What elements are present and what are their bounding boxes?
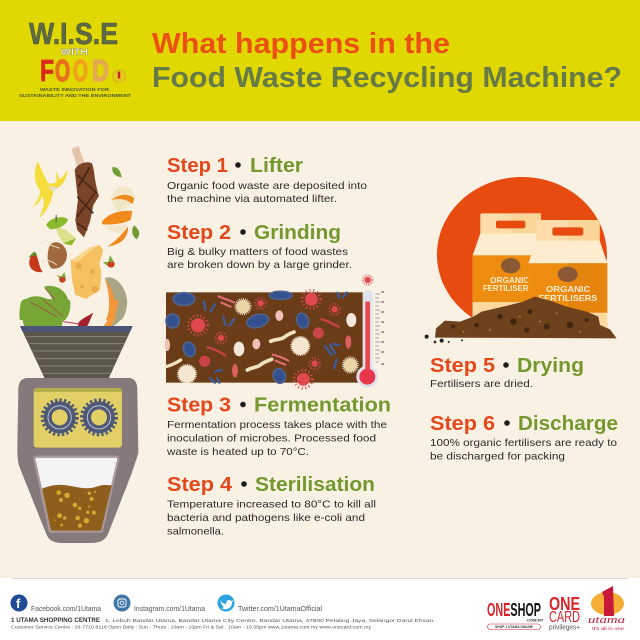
address name: 1 UTAMA SHOPPING CENTRE [11,617,101,624]
step 6: Step 6 [430,413,495,435]
icon: potato with sprouts [38,241,67,269]
icon: right gear [82,400,116,434]
icon: melon rind [105,277,127,320]
logo: OneShop: SHOP 1 UTAMA ONLINE [495,625,534,629]
logo: OneCard: privileges+ [549,622,581,632]
contact line: Customer Service Centre : 03-7710 8118 Open Daily : Sun - Thurs : 10am - 10pm Fri & Sat : 10am - 10.30pm www.1utama.com.my www.onecard.com.my [11,624,372,630]
step 1 [167,155,367,205]
logo: OneShop: .COM.MY [526,618,544,622]
fertiliser illustration [425,177,617,343]
icon: banana peel [32,162,68,218]
front fertiliser bag [528,220,607,333]
icon: tomato pieces [28,251,115,283]
step 3: Step 3 [167,394,231,416]
logo: WISE with Food: SUSTAINABILITY AND THE ENVIRONMENT [19,93,131,99]
icon: beet leaf [19,286,70,320]
logo: OneShop: ONESHOP [487,600,541,620]
step 2: Grinding [254,222,341,244]
back fertiliser bag: ORGANIC [490,276,530,285]
step 3: Fermentation process takes place with the [167,419,387,431]
logo: WISE with Food: WITH [61,47,88,58]
step 5: Drying [517,355,584,377]
thermometer [356,275,384,388]
step 2: are broken down by a large grinder. [167,259,352,271]
pale spores [178,299,358,383]
icon: apple core [46,215,76,245]
title: Food Waste Recycling Machine? [152,62,622,94]
front fertiliser bag: FERTILISERS [539,293,598,303]
step 2: Big & bulky matters of food wastes [167,246,348,258]
header band [0,0,640,121]
step 4: Temperature increased to 80°C to kill all [167,498,376,510]
icon: instagram [114,594,130,612]
logo: 1 Utama [588,586,626,631]
title [152,28,622,94]
logo: OneCard [549,594,581,632]
food scraps illustration [19,146,139,320]
logo: OneCard: ONE [549,594,580,614]
machine body [17,378,138,543]
logo: 1 Utama: It's all in one [592,626,625,631]
step 5 [430,355,584,390]
leaf and melon above hopper [20,298,127,326]
logo: WISE with Food: O [55,53,70,88]
step 5: Step 5 [430,355,495,377]
soil pile [425,297,617,343]
icon: steak on bone [71,146,99,237]
back fertiliser bag: FERTILISER [483,284,529,293]
logo: OneCard: CARD [549,609,580,626]
step 1: the machine via automated lifter. [167,193,337,205]
step 2 [167,222,352,271]
icon: cheese [71,245,103,299]
worm microbes [166,296,339,370]
step 5: Fertilisers are dried. [430,378,533,390]
step 4: Sterilisation [255,474,375,496]
microbes panel [165,290,363,388]
machine illustration [17,298,138,543]
blue bacteria [166,291,311,385]
step 2: Step 2 [167,222,231,244]
logo: WISE with Food: D [92,53,109,88]
icon: left gear [43,400,77,434]
step 3: Fermentation [254,394,391,416]
logo: WISE with Food [19,16,131,99]
red viruses [188,290,351,388]
step 1: Lifter [250,155,303,177]
icon: orange peel spiral [102,186,134,247]
twitter label: Twitter.com/1UtamaOfficial [238,604,322,613]
icon: facebook [10,594,28,612]
step 4 [167,474,376,538]
icon: red sun [363,275,372,285]
step 4: Step 4 [167,474,233,496]
step 4: bacteria and pathogens like e-coli and [167,512,365,524]
back fertiliser bag [473,213,541,322]
small rods [204,293,347,383]
gear panel [34,388,122,448]
step 3: waste is heated up to 70°C. [166,446,309,458]
title: What happens in the [152,28,450,60]
orange sun circle [437,177,607,318]
step 3 [166,394,391,458]
step 1: Step 1 [167,155,228,177]
hopper [20,326,133,378]
step 6: be discharged for packing [430,450,565,462]
chamber with compost [34,457,118,532]
footer [0,578,640,640]
instagram label: Instagram.com/1Utama [134,604,206,613]
logo: WISE with Food: WASTE INNOVATION FOR [40,87,110,93]
front fertiliser bag: ORGANIC [546,284,590,294]
address line: 1, Lebuh Bandar Utama, Bandar Utama City Centre, Bandar Utama, 47800 Petaling Jaya, Selangor Darul Ehsan. [105,618,435,623]
step 4: salmonella. [167,526,224,538]
logo: WISE with Food: F [40,53,54,88]
facebook label: Facebook.com/1Utama [31,604,102,613]
logo: WISE with Food: O [73,53,88,88]
icon: twitter [218,594,234,612]
icon: basil leaves [112,167,139,239]
step 3: inoculation of microbes. Processed food [167,432,376,444]
step 6 [430,413,618,462]
pale germs [165,310,356,356]
logo: 1 Utama: utama [588,614,626,626]
logo: OneShop [487,600,544,630]
step 1: Organic food waste are deposited into [167,180,367,192]
icon: facebook: f [16,596,21,611]
step 6: Discharge [518,413,618,435]
logo: WISE with Food: W.I.S.E [29,16,118,51]
step 6: 100% organic fertilisers are ready to [430,437,617,449]
